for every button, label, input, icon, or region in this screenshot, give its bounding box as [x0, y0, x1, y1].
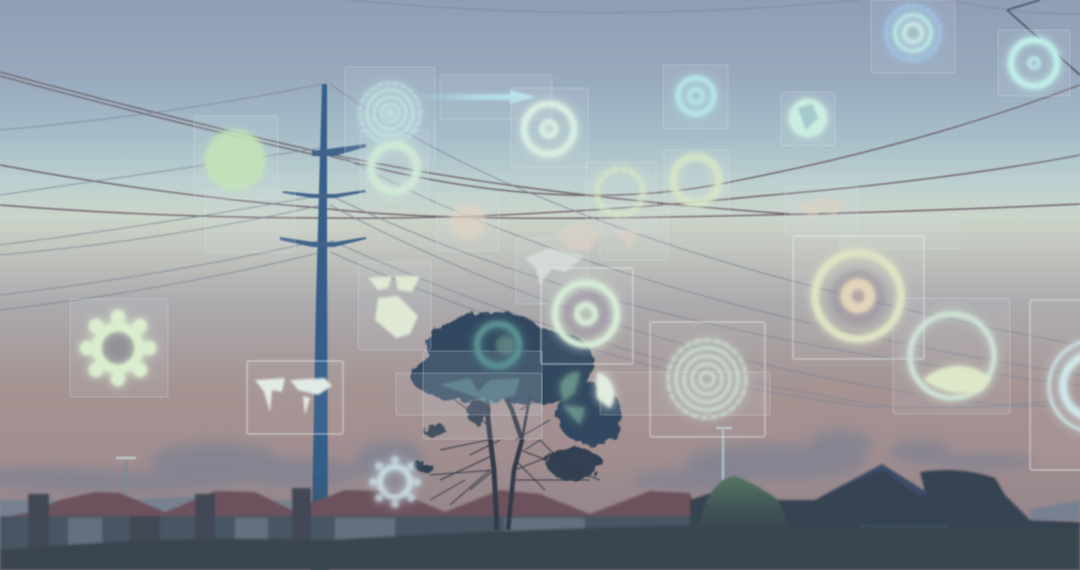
lower foliage: [416, 400, 603, 480]
tree crown: [410, 312, 622, 445]
utility pole: [280, 84, 366, 570]
distant clouds: [0, 430, 1035, 492]
filled glows: [205, 99, 990, 425]
distant hills: [0, 496, 1080, 520]
glowing rings: [360, 6, 1080, 432]
tree branches: [430, 395, 600, 530]
power lines: [0, 0, 1080, 408]
arrow beam: [420, 90, 536, 104]
street lamps: [116, 428, 732, 570]
row of houses: [0, 488, 710, 570]
icon panels: [70, 0, 1070, 439]
gear icons: [80, 310, 421, 508]
world maps: [255, 198, 846, 415]
landscape: [0, 464, 1080, 570]
tree: [410, 312, 622, 530]
ground and dark right-hand house and trees: [0, 464, 1080, 570]
